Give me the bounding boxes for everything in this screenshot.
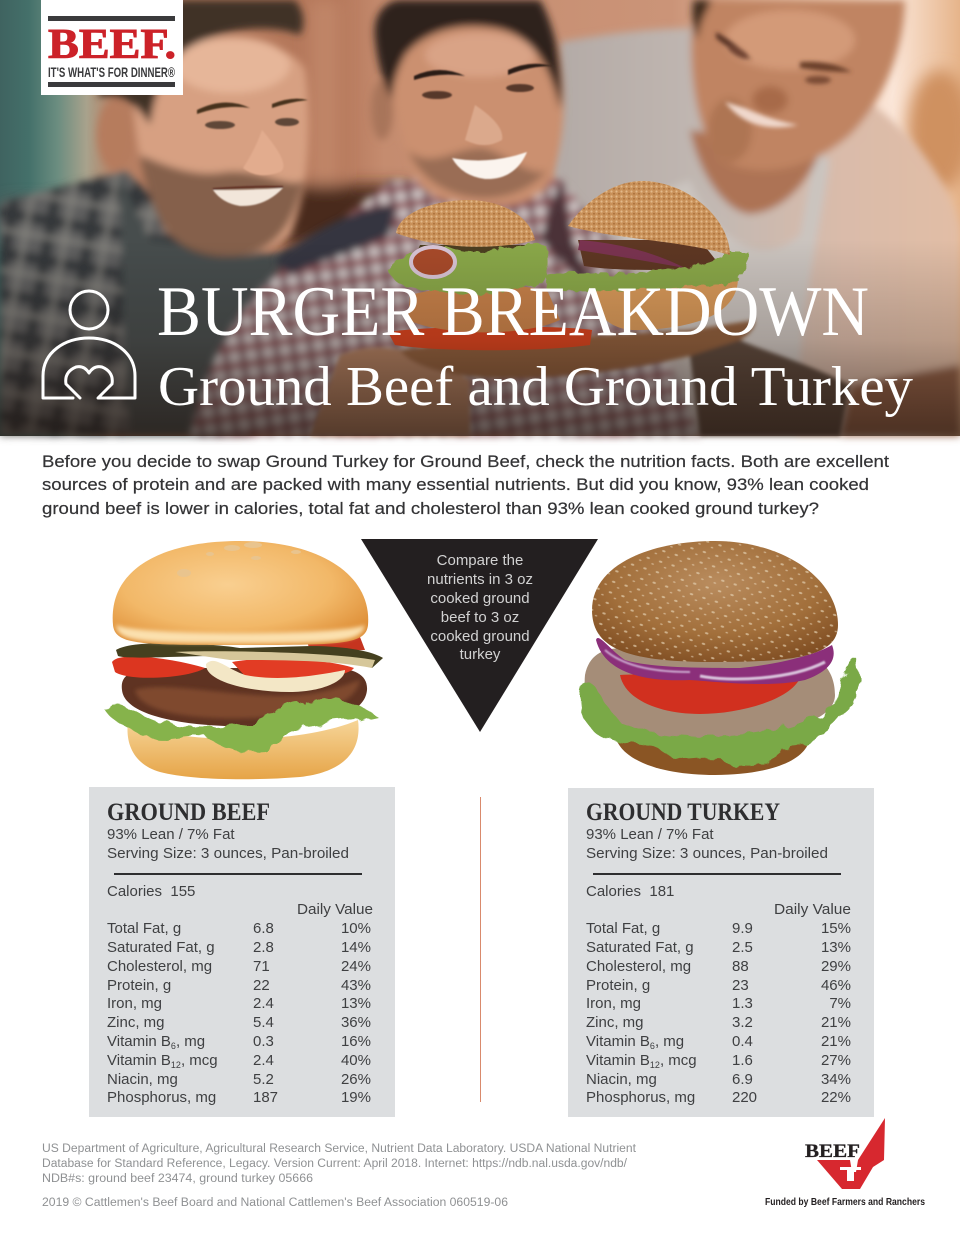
nutrient table: turkey: Daily Value [774, 901, 851, 918]
triangle callout: cooked ground [430, 590, 530, 607]
nutrient table: turkey [586, 901, 851, 1106]
nutrient table: turkey: 220 [732, 1089, 757, 1106]
nutrient table: beef: 40% [341, 1052, 371, 1069]
nutrient table: beef: 14% [341, 939, 371, 956]
hero bottom shading [0, 0, 960, 436]
serving information: Serving Size: 3 ounces, Pan-broiled [107, 845, 349, 862]
illustration: ground beef burger [103, 541, 383, 779]
nutrient table: turkey: 1.6 [732, 1052, 753, 1069]
nutrient table: turkey: 21% [821, 1033, 851, 1050]
nutrient table: turkey: 22% [821, 1089, 851, 1106]
nutrient table: beef: 0.3 [253, 1033, 274, 1050]
nutrient table: turkey: 15% [821, 920, 851, 937]
nutrient table: beef: 6.8 [253, 920, 274, 937]
nutrient table: turkey: Vitamin B [586, 1033, 650, 1050]
nutrient table: beef: Cholesterol, mg [107, 958, 212, 975]
triangle callout: beef to 3 oz [441, 609, 519, 626]
nutrient table: turkey: 7% [829, 995, 851, 1012]
nutrient table: beef: 12 [171, 1060, 181, 1070]
nutrient table: beef: 2.4 [253, 1052, 274, 1069]
nutrient table: beef: 16% [341, 1033, 371, 1050]
nutrient table: turkey: 13% [821, 939, 851, 956]
nutrient table: beef: Total Fat, g [107, 920, 181, 937]
brand logo: BEEF It's What's For Dinner: IT'S WHAT'S FOR DINNER® [48, 64, 175, 80]
panel: ground turkey nutrition [568, 788, 874, 1117]
nutrient table: beef: 36% [341, 1014, 371, 1031]
man in the middle [190, 0, 700, 436]
nutrient table: turkey: Zinc, mg [586, 1014, 644, 1031]
nutrient table: beef: Protein, g [107, 977, 171, 994]
nutrient table: beef: Iron, mg [107, 995, 162, 1012]
nutrient table: turkey: Total Fat, g [586, 920, 660, 937]
icon: person with heart [43, 291, 135, 398]
triangle callout: nutrients in 3 oz [427, 571, 533, 588]
panel: ground beef nutrition [89, 787, 395, 1117]
man on the right [552, 0, 960, 436]
nutrient table: beef: 5.4 [253, 1014, 274, 1031]
nutrient table: turkey: 9.9 [732, 920, 753, 937]
calories: Calories 181 [586, 883, 674, 900]
triangle callout: cooked ground [430, 628, 530, 645]
nutrient table: turkey: 29% [821, 958, 851, 975]
nutrient table: turkey: 6 [650, 1041, 655, 1051]
panel heading: ground beef: GROUND BEEF [107, 799, 270, 826]
nutrient table: beef: Niacin, mg [107, 1071, 178, 1088]
nutrient table: turkey: 23 [732, 977, 749, 994]
serving information: 93% Lean / 7% Fat [107, 826, 235, 843]
nutrient table: beef: Vitamin B [107, 1052, 171, 1069]
nutrient table: beef: Daily Value [297, 901, 373, 918]
title [157, 273, 913, 418]
nutrient table: turkey: Protein, g [586, 977, 650, 994]
burgers on board [388, 181, 748, 350]
nutrient table: beef: 26% [341, 1071, 371, 1088]
nutrient table: beef: 6 [171, 1041, 176, 1051]
intro paragraph: Before you decide to swap Ground Turkey for Ground Beef, check the nutrition facts. Both are excellent [42, 452, 889, 471]
brand logo: BEEF It's What's For Dinner [41, 0, 183, 95]
nutrient table: turkey: 0.4 [732, 1033, 753, 1050]
footer references: 2019 © Cattlemen's Beef Board and National Cattlemen's Beef Association 060519-06 [42, 1197, 508, 1209]
panel heading: ground turkey: GROUND TURKEY [586, 799, 780, 826]
nutrient table: beef: 43% [341, 977, 371, 994]
nutrient table: beef: Zinc, mg [107, 1014, 165, 1031]
footer references [42, 1143, 637, 1209]
nutrient table: beef: , mg [176, 1033, 205, 1050]
serving information: 93% Lean / 7% Fat [586, 826, 714, 843]
nutrient table: turkey: Cholesterol, mg [586, 958, 691, 975]
intro paragraph [42, 452, 889, 518]
nutrient table: beef [107, 901, 373, 1106]
hand and wooden board [310, 320, 850, 436]
nutrient table: beef: 5.2 [253, 1071, 274, 1088]
nutrient table: turkey: 21% [821, 1014, 851, 1031]
nutrient table: turkey: 12 [650, 1060, 660, 1070]
center divider line [480, 797, 481, 1102]
logo: Beef checkoff: Funded by Beef Farmers and Ranchers [765, 1197, 925, 1208]
nutrient table: turkey: 6.9 [732, 1071, 753, 1088]
nutrient table: turkey: 2.5 [732, 939, 753, 956]
nutrient table: turkey: 1.3 [732, 995, 753, 1012]
nutrient table: turkey: Niacin, mg [586, 1071, 657, 1088]
nutrient table: beef: 10% [341, 920, 371, 937]
nutrient table: beef: 2.4 [253, 995, 274, 1012]
nutrient table: beef: 71 [253, 958, 270, 975]
serving information: Serving Size: 3 ounces, Pan-broiled [586, 845, 828, 862]
nutrient table: beef: , mcg [181, 1052, 218, 1069]
man on the left [0, 0, 309, 436]
footer references: NDB#s: ground beef 23474, ground turkey 05666 [42, 1173, 313, 1185]
nutrient table: turkey: 34% [821, 1071, 851, 1088]
nutrient table: turkey: , mcg [660, 1052, 697, 1069]
logo: Beef checkoff [765, 1118, 925, 1208]
nutrient table: turkey: Saturated Fat, g [586, 939, 694, 956]
nutrient table: turkey: 3.2 [732, 1014, 753, 1031]
serving information [586, 826, 828, 862]
nutrient table: turkey: Vitamin B [586, 1052, 650, 1069]
nutrient table: beef: 13% [341, 995, 371, 1012]
nutrient table: turkey: Phosphorus, mg [586, 1089, 695, 1106]
calories: Calories 155 [107, 883, 195, 900]
logo: Beef checkoff: BEEF [805, 1141, 860, 1162]
nutrient table: beef: Saturated Fat, g [107, 939, 215, 956]
nutrient table: turkey: 88 [732, 958, 749, 975]
triangle callout: Compare the [437, 552, 523, 569]
brand logo: BEEF It's What's For Dinner: BEEF. [48, 22, 176, 68]
nutrient table: turkey: 27% [821, 1052, 851, 1069]
hero photo: three men with burgers [0, 0, 960, 436]
nutrient table: turkey: 46% [821, 977, 851, 994]
nutrient table: beef: 19% [341, 1089, 371, 1106]
title: Ground Beef and Ground Turkey [158, 356, 913, 418]
nutrient table: beef: 22 [253, 977, 270, 994]
nutrient table: turkey: , mg [655, 1033, 684, 1050]
triangle callout: turkey [460, 646, 501, 663]
nutrient table: beef: 24% [341, 958, 371, 975]
intro paragraph: sources of protein and are packed with many essential nutrients. But did you know, 93% lean cooked [42, 475, 869, 494]
nutrient table: beef: Vitamin B [107, 1033, 171, 1050]
nutrient table: beef: Phosphorus, mg [107, 1089, 216, 1106]
nutrient table: beef: 187 [253, 1089, 278, 1106]
footer references: US Department of Agriculture, Agricultural Research Service, Nutrient Data Laboratory. USDA National Nutrient [42, 1143, 637, 1155]
serving information [107, 826, 349, 862]
illustration: ground turkey burger [579, 541, 859, 775]
nutrient table: beef: 2.8 [253, 939, 274, 956]
title: BURGER BREAKDOWN [157, 273, 869, 351]
nutrient table: turkey: Iron, mg [586, 995, 641, 1012]
footer references: Database for Standard Reference, Legacy. Version Current: April 2018. Internet: https://ndb.nal.usda.gov/ndb/ [42, 1158, 628, 1170]
triangle callout [361, 539, 598, 732]
intro paragraph: ground beef is lower in calories, total fat and cholesterol than 93% lean cooked ground turkey? [42, 499, 819, 518]
